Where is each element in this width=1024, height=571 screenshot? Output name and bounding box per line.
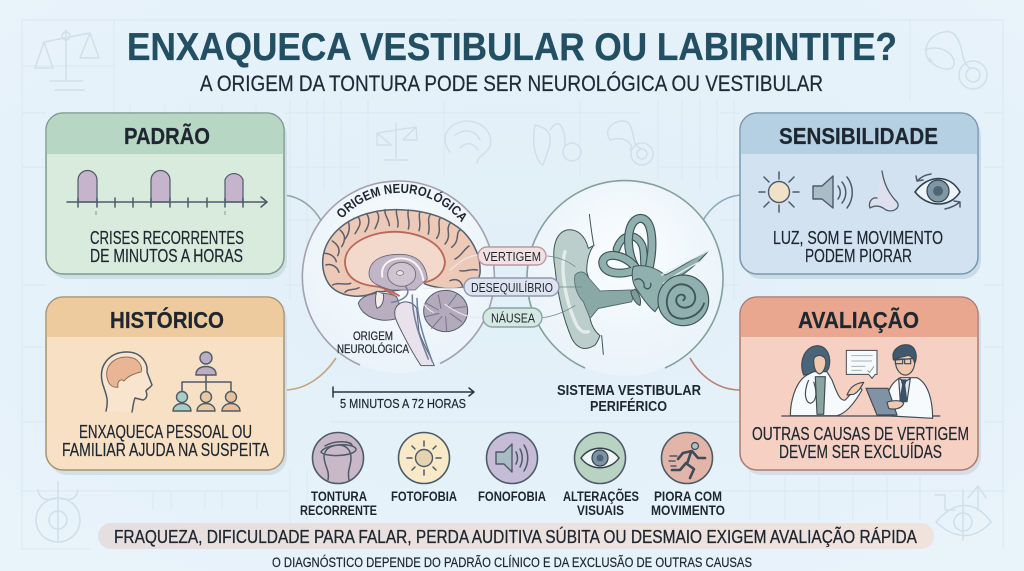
- heading: HISTÓRICO: [110, 306, 224, 333]
- text: [752, 424, 969, 462]
- woman doctor: [790, 346, 864, 416]
- symptom: alterações visuais: VISUAIS: [577, 503, 624, 518]
- text: ENXAQUECA PESSOAL OU: [79, 422, 252, 442]
- heading: PADRÃO: [124, 122, 210, 149]
- label: sistema vestibular: SISTEMA VESTIBULAR: [557, 383, 701, 399]
- symptom: alterações visuais: ALTERAÇÕES: [563, 489, 639, 504]
- ear illustration: [542, 214, 709, 354]
- text: CRISES RECORRENTES: [90, 228, 244, 248]
- icon: faint inner ear top right: [925, 32, 987, 89]
- diagram: brain disc: [302, 180, 496, 366]
- symptom: piora com movimento: [651, 432, 725, 518]
- text: [90, 228, 244, 266]
- icon: nose: [869, 171, 898, 211]
- icon: faint brain: [445, 121, 491, 163]
- footer note: O DIAGNÓSTICO DEPENDE DO PADRÃO CLÍNICO E DA EXCLUSÃO DE OUTRAS CAUSAS: [272, 554, 752, 570]
- symptom: tontura recorrente: TONTURA: [311, 489, 367, 504]
- symptom: fotofobia: FOTOFOBIA: [391, 489, 457, 504]
- duration arrow: 5 MINUTOS A 72 HORAS: [340, 396, 466, 411]
- icon: speaker: [813, 176, 852, 208]
- speech bubble: [846, 350, 877, 378]
- connector: padrão: [284, 195, 322, 222]
- symptom: tontura recorrente: [300, 432, 377, 518]
- icon: head with brain: [102, 352, 152, 412]
- icon: family tree: [173, 352, 240, 411]
- symptom: piora com movimento: PIORA COM: [654, 489, 722, 504]
- heading: SENSIBILIDADE: [779, 123, 938, 149]
- text: [773, 228, 943, 266]
- text: DE MINUTOS A HORAS: [90, 246, 243, 266]
- symptom: fotofobia: [391, 432, 457, 504]
- label pill: náusea: NÁUSEA: [491, 310, 535, 326]
- pointer lines: [542, 256, 582, 318]
- brain illustration: [323, 210, 483, 366]
- panel: sensibilidade: [740, 113, 981, 279]
- connector: sensibilidade: [702, 195, 740, 222]
- heading: AVALIAÇÃO: [798, 306, 919, 333]
- text: [62, 422, 269, 460]
- label pill: náusea: [483, 308, 542, 327]
- semicircular canals: [603, 218, 652, 273]
- connector: avaliação: [690, 358, 740, 390]
- label pill: desequilíbrio: [464, 278, 559, 296]
- icon: sun: [759, 172, 799, 212]
- symptom: piora com movimento: MOVIMENTO: [651, 503, 725, 518]
- panel: padrão: [46, 113, 287, 279]
- label: sistema vestibular: PERIFÉRICO: [590, 398, 667, 415]
- label pill: vertigem: VERTIGEM: [483, 249, 541, 264]
- panel: avaliação: [740, 297, 981, 475]
- text: LUZ, SOM E MOVIMENTO: [773, 228, 943, 248]
- man doctor: [866, 345, 933, 418]
- pointer lines: [423, 255, 483, 318]
- curved label: ORIGEM NEUROLÓGICA: [337, 184, 466, 222]
- icon: faint ear: [534, 124, 581, 165]
- symptom: tontura recorrente: RECORRENTE: [300, 503, 377, 518]
- diagram: inner ear disc: [527, 180, 723, 376]
- text: DEVEM SER EXCLUÍDAS: [779, 442, 942, 462]
- icon: faint eye bottom right: [935, 486, 991, 540]
- subtitle: A ORIGEM DA TONTURA PODE SER NEUROLÓGICA OU VESTIBULAR: [200, 71, 823, 96]
- title: ENXAQUECA VESTIBULAR OU LABIRINTITE?: [127, 26, 897, 69]
- label: sistema vestibular: [557, 383, 701, 415]
- symptom: fonofobia: FONOFOBIA: [478, 489, 546, 504]
- connector: histórico: [284, 358, 336, 390]
- icon: faint spiral bottom left: [36, 482, 80, 542]
- icon: faint scales top left: [35, 30, 99, 90]
- panel: histórico: [46, 297, 287, 475]
- illustration: two doctors: [781, 345, 940, 418]
- label pill: desequilíbrio: DESEQUILÍBRIO: [471, 280, 553, 295]
- label: [337, 329, 409, 356]
- text: FAMILIAR AJUDA NA SUSPEITA: [62, 440, 269, 460]
- duration arrow: [333, 387, 474, 411]
- icon: faint scales middle: [377, 123, 417, 160]
- text: PODEM PIORAR: [805, 246, 912, 266]
- symptom: fonofobia: [478, 432, 546, 504]
- label: NEUROLÓGICA: [337, 341, 409, 356]
- symptom: alterações visuais: [563, 432, 639, 518]
- icon: eye with arrows: [915, 174, 960, 209]
- icon: faint inner ear: [608, 121, 653, 165]
- chart: crises timeline: [67, 170, 267, 215]
- label: ORIGEM: [353, 329, 393, 343]
